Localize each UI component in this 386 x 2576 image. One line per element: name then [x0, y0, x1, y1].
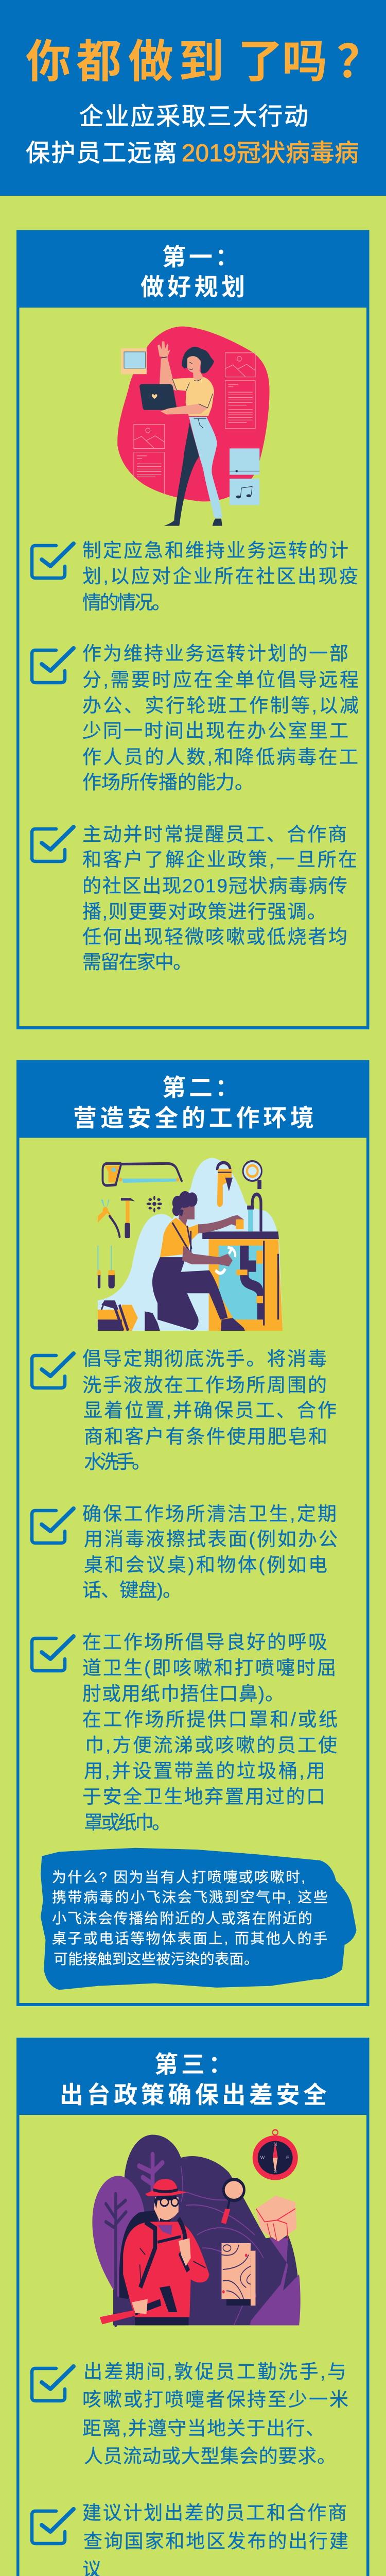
item text: 商和客户有条件使用肥皂和 — [84, 1426, 327, 1447]
item text: 显着位置,并确保员工、合作 — [83, 1400, 337, 1421]
item text: 于安全卫生地弃置用过的口 — [82, 1786, 325, 1807]
item text: 划,以应对企业所在社区出现疫 — [82, 566, 358, 587]
check icon — [32, 544, 74, 578]
callout: why: 可能接触到这些被污染的表面。 — [54, 1951, 258, 1967]
item text: 作为维持业务运转计划的一部 — [82, 643, 348, 664]
subtitle line 2 white: 保护员工远离 — [26, 139, 177, 166]
check icon — [32, 1636, 74, 1671]
item text: 情的情况。 — [82, 592, 171, 613]
item text: 道卫生(即咳嗽和打喷嚏时屈 — [82, 1657, 336, 1679]
item text — [82, 1632, 338, 1833]
callout: why: 携带病毒的小飞沫会飞溅到空气中, 这些 — [52, 1889, 328, 1905]
item text — [82, 540, 358, 613]
item text — [82, 1503, 338, 1601]
item text: 查询国家和地区发布的出行建 — [83, 2531, 348, 2552]
check item 5 — [32, 1503, 338, 1601]
check icon — [32, 827, 74, 861]
compass letters — [260, 2142, 289, 2174]
title: 你都做到了吗？ — [26, 36, 382, 87]
item text: 咳嗽或打喷嚏者保持至少一米 — [82, 2389, 348, 2410]
check item 1 — [32, 540, 358, 613]
item text: 制定应急和维持业务运转的计 — [82, 540, 348, 561]
check item 7 — [32, 2361, 348, 2467]
item text: 人员流动或大型集会的要求。 — [84, 2446, 336, 2467]
item text: 桌和会议桌)和物体(例如电 — [84, 1554, 327, 1575]
check item 3 — [32, 824, 357, 973]
item text: 罩或纸巾。 — [84, 1812, 171, 1833]
item text: 少同一时间出现在办公室里工 — [82, 720, 348, 741]
item text: 主动并时常提醒员工、合作商 — [82, 824, 347, 845]
item text — [82, 643, 359, 793]
callout: why: 桌子或电话等物体表面上, 而其他人的手 — [52, 1930, 327, 1946]
item text: 在工作场所提供口罩和/或纸 — [82, 1709, 338, 1730]
item text: 需留在家中。 — [82, 952, 192, 973]
subtitle line 1: 企业应采取三大行动 — [79, 103, 308, 130]
item text: 建议计划出差的员工和合作商 — [82, 2502, 347, 2523]
item text: 用消毒液擦拭表面(例如办公 — [84, 1529, 338, 1550]
check item 4 — [32, 1348, 337, 1472]
item text: 距离,并遵守当地关于出行、 — [82, 2418, 325, 2439]
item text: 任何出现轻微咳嗽或低烧者均 — [82, 926, 347, 947]
item text — [82, 824, 357, 973]
panel 2 heading line 2: 营造安全的工作环境 — [73, 1105, 314, 1131]
item text: 播,则更要对政策进行强调。 — [82, 901, 326, 922]
item text: 办公、实行轮班工作制等,以减 — [82, 695, 359, 716]
check item 8 — [32, 2502, 348, 2576]
panel 1 heading line 2: 做好规划 — [141, 274, 245, 300]
item text: 肘或用纸巾捂住口鼻)。 — [82, 1683, 284, 1704]
item text — [82, 1348, 337, 1472]
item text — [82, 2502, 348, 2576]
check icon — [32, 648, 74, 683]
item text: 用,并设置带盖的垃圾桶,用 — [84, 1760, 325, 1782]
item text: 倡导定期彻底洗手。将消毒 — [82, 1348, 327, 1369]
panel 3 heading line 1: 第三： — [154, 2051, 232, 2078]
subtitle line 2 orange: 2019冠状病毒病 — [182, 139, 359, 166]
item text: 话、键盘)。 — [82, 1580, 182, 1601]
item text: 作场所传播的能力。 — [82, 772, 254, 793]
panel 3 heading line 2: 出台政策确保出差安全 — [60, 2081, 327, 2108]
check icon — [32, 2366, 74, 2401]
compass letters: W — [260, 2155, 265, 2160]
check icon — [32, 1353, 74, 1388]
item text: 分,需要时应在全单位倡导远程 — [82, 669, 359, 690]
callout: why: 为什么? 因为当有人打喷嚏或咳嗽时, — [52, 1869, 305, 1885]
illustration: woman with laptop — [117, 327, 270, 526]
panel 1 heading line 1: 第一： — [162, 244, 239, 270]
compass letters: N — [274, 2142, 277, 2147]
item text: 洗手液放在工作场所周围的 — [82, 1375, 327, 1396]
item text: 的社区出现2019冠状病毒病传 — [82, 875, 347, 896]
item text: 出差期间,敦促员工勤洗手,与 — [83, 2361, 346, 2382]
compass letters: E — [286, 2155, 289, 2160]
item text: 确保工作场所清洁卫生,定期 — [82, 1503, 337, 1524]
illustration: plumber with tools — [98, 1158, 283, 1331]
item text: 在工作场所倡导良好的呼吸 — [82, 1632, 327, 1653]
panel 2: safe workplace — [16, 1060, 370, 2006]
item text: 水洗手。 — [84, 1451, 151, 1472]
item text: 和客户了解企业政策,一旦所在 — [82, 849, 357, 870]
check icon — [32, 1509, 74, 1543]
check icon — [32, 2509, 74, 2544]
item text: 巾,方便流涕或咳嗽的员工使 — [85, 1735, 337, 1756]
panel 3: travel safety — [16, 2038, 370, 2576]
compass letters: S — [274, 2169, 277, 2174]
illustration: hiker with map — [92, 2130, 301, 2325]
item text: 作人员的人数,和降低病毒在工 — [82, 747, 358, 768]
panel 2 heading line 1: 第二： — [162, 1074, 239, 1101]
panel 1: planning — [16, 230, 370, 1029]
callout: why: 小飞沫会传播给附近的人或落在附近的 — [52, 1910, 312, 1926]
header banner — [0, 0, 386, 196]
check item 6 — [32, 1632, 338, 1833]
callout: why — [41, 1848, 357, 1990]
check item 2 — [32, 643, 359, 793]
item text — [82, 2361, 348, 2467]
